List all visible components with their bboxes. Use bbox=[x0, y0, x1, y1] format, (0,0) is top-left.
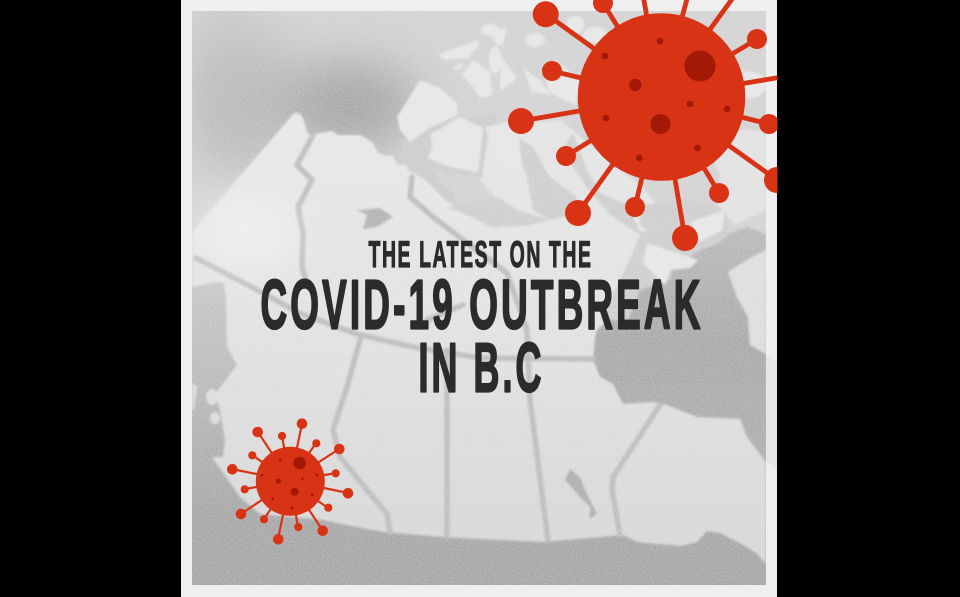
map of Canada bbox=[192, 16, 767, 564]
mainland bbox=[192, 113, 766, 564]
provincial borders bbox=[196, 135, 660, 540]
page frame bbox=[181, 0, 777, 597]
title bbox=[260, 234, 704, 406]
Great Bear Lake bbox=[357, 208, 393, 229]
eastern land bbox=[728, 250, 766, 354]
west coast islands bbox=[192, 383, 220, 424]
title line 1: THE LATEST ON THE bbox=[368, 234, 592, 275]
title line 3: IN B.C bbox=[418, 328, 544, 406]
large virus bbox=[508, 0, 790, 251]
small virus bbox=[227, 418, 353, 545]
arctic islands bbox=[397, 16, 767, 285]
arctic land block bbox=[480, 120, 660, 240]
map background bbox=[185, 5, 767, 585]
Hudson Bay bbox=[594, 227, 766, 424]
Lake Winnipeg bbox=[565, 469, 597, 519]
right black bar bbox=[778, 0, 960, 597]
faint map edge on frame bbox=[766, 354, 777, 470]
film grain bbox=[192, 11, 766, 585]
Alaska highlight bbox=[198, 194, 298, 270]
arctic channels bbox=[519, 139, 576, 220]
